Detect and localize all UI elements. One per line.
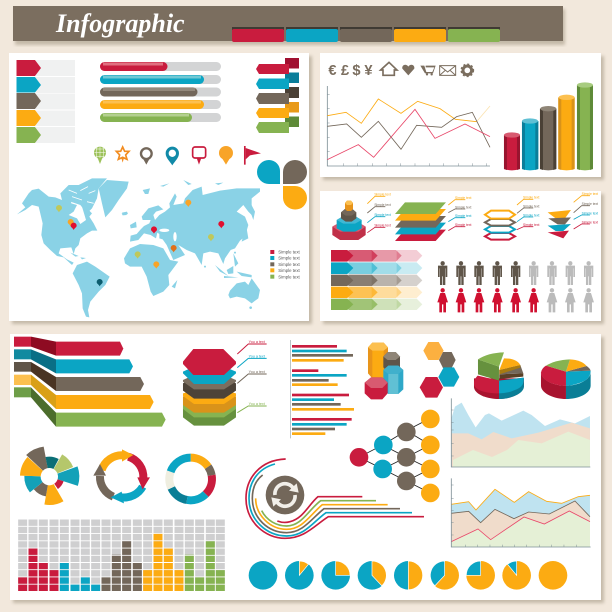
- leader labels: rings: [517, 196, 540, 230]
- currency and web icons: ¥: [364, 63, 373, 79]
- area chart top: [451, 398, 590, 467]
- stacked layer sheets: [395, 202, 446, 241]
- header banner: [13, 6, 565, 45]
- map legend: Simple text: [278, 274, 301, 279]
- radial wedge chart: [20, 447, 79, 505]
- 3D hexagon pillars: [365, 343, 403, 399]
- leader labels: pyramid: Simple text: [374, 213, 391, 217]
- leader labels: hexagon stack: You a text: [249, 402, 265, 406]
- whole pie chart: [541, 359, 591, 399]
- leader labels: hexagon stack: You a text: [249, 340, 265, 344]
- map legend: Simple text: [278, 256, 301, 261]
- currency and web icons: [328, 62, 473, 79]
- map legend: Simple text: [278, 250, 301, 255]
- leader labels: pyramid: Simple text: [374, 203, 391, 207]
- leader labels: slices: Simple text: [582, 220, 598, 224]
- leader labels: layers: Simple text: [455, 196, 472, 200]
- leader labels: slices: Simple text: [582, 192, 598, 196]
- pie progression row: [249, 561, 567, 590]
- 3D column chart: [504, 82, 593, 170]
- circular refresh badge: [266, 476, 304, 514]
- map legend: Simple text: [278, 268, 301, 273]
- arrow tag list: [16, 60, 75, 143]
- network circles: [350, 410, 440, 502]
- fading chevron rows: [331, 250, 422, 310]
- icon: speech pin: [193, 147, 206, 165]
- flat hexagon cluster: [420, 342, 459, 398]
- icon: flag: [244, 146, 261, 165]
- leader labels: rings: Simple text: [523, 213, 540, 217]
- title: Infographic: [55, 9, 185, 38]
- leader labels: hexagon stack: You a text: [249, 370, 265, 374]
- map location pins: [56, 200, 224, 286]
- panel: line chart and bars: [320, 53, 604, 180]
- hexagon ring stack: [485, 211, 515, 240]
- quarter blobs: [257, 160, 307, 210]
- leader labels: layers: Simple text: [455, 205, 472, 209]
- area chart bottom: [451, 478, 591, 547]
- world map: [17, 178, 301, 317]
- panel: stacks, arrows and people: [320, 191, 604, 324]
- line chart: [327, 86, 490, 166]
- map legend: Simple text: [278, 262, 301, 267]
- icon: ring pin: [141, 148, 152, 165]
- map legend: [270, 250, 301, 279]
- waffle grid chart: [23, 519, 220, 591]
- hexagon layer stack: [183, 349, 236, 426]
- currency and web icons: €: [328, 63, 336, 79]
- leader labels: slices: Simple text: [582, 211, 598, 215]
- currency and web icons: £: [341, 63, 349, 79]
- horizontal bar groups: [291, 340, 354, 438]
- currency and web icons: $: [352, 63, 360, 79]
- leader labels: layers: [448, 196, 472, 231]
- leader labels: rings: Simple text: [523, 223, 540, 227]
- 3D step arrows: [14, 337, 166, 427]
- icon: star pin: [116, 147, 129, 163]
- panel: charts collection: [10, 334, 604, 603]
- male pictograms: [438, 261, 593, 285]
- female pictograms: [437, 288, 594, 312]
- ribbon tags: [256, 58, 299, 133]
- map pin icons: [94, 146, 261, 165]
- segmented donut: [169, 458, 212, 500]
- inverted pyramid slices: [548, 210, 571, 238]
- leader labels: pyramid: Simple text: [374, 193, 391, 197]
- icon: solid pin: [219, 146, 233, 165]
- leader labels: hexagon stack: You a text: [249, 354, 265, 358]
- leader labels: hexagon stack: [237, 340, 267, 413]
- icon: blue pin: [166, 147, 179, 165]
- panel: map and labels: [9, 53, 312, 324]
- icon: globe pin: [94, 147, 106, 164]
- leader labels: rings: Simple text: [523, 196, 540, 200]
- header tabs: [232, 27, 500, 42]
- leader labels: rings: Simple text: [523, 204, 540, 208]
- leader labels: pyramid: [367, 193, 391, 233]
- hexagon pyramid: [332, 201, 366, 240]
- leader labels: layers: Simple text: [455, 223, 472, 227]
- swoosh lines: [246, 459, 424, 538]
- leader labels: pyramid: Simple text: [374, 224, 391, 228]
- leader labels: slices: Simple text: [582, 202, 598, 206]
- progress bars: [100, 62, 221, 122]
- leader labels: layers: Simple text: [455, 214, 472, 218]
- leader labels: slices: [574, 192, 598, 229]
- exploded pie chart: [474, 352, 524, 399]
- circular arrows: [93, 449, 150, 503]
